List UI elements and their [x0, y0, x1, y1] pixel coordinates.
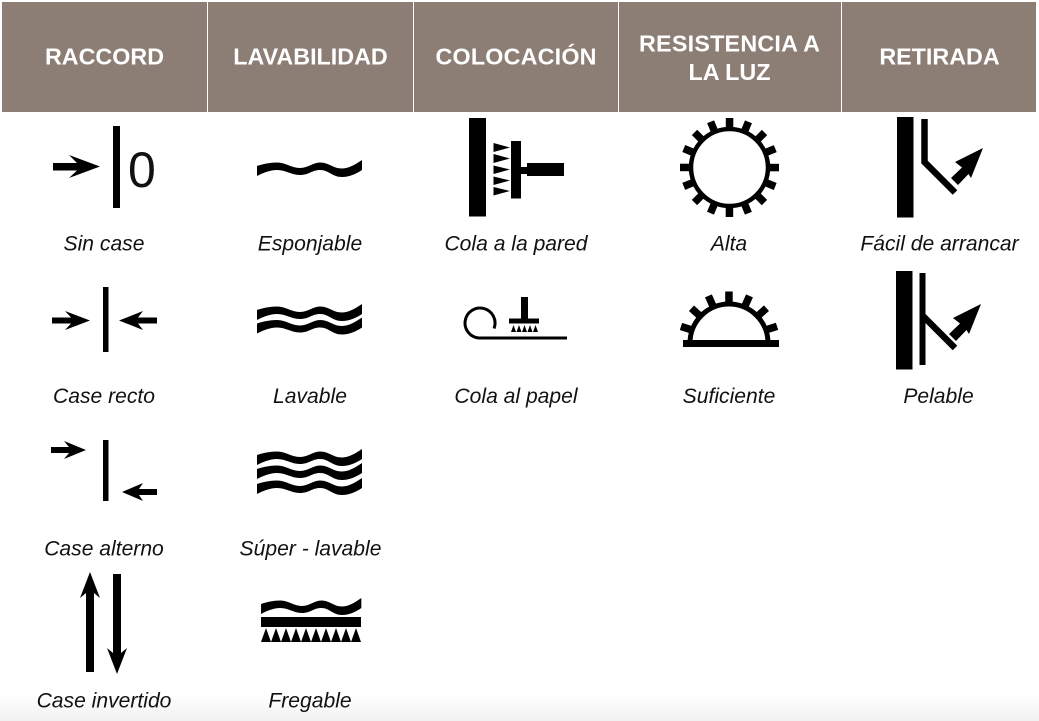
column: Lavabilidad [240, 160, 381, 712]
header: Resistencia a la luz: LA LUZ [689, 59, 770, 85]
icon: lavable [257, 304, 362, 334]
label: Esponjable: Esponjable [258, 232, 362, 256]
label: Cola a la pared: Cola a la pared [444, 232, 589, 256]
label: Alta: Alta [709, 232, 747, 256]
icon: sol alta [680, 118, 779, 217]
label: Fregable: Fregable [268, 690, 352, 712]
header: Raccord: RACCORD [45, 44, 164, 70]
label: Suficiente: Suficiente [683, 385, 775, 408]
icon: cola al papel [465, 297, 567, 338]
icon: fácil de arrancar [897, 117, 983, 218]
header: Retirada [842, 2, 1036, 112]
header: Raccord [2, 2, 207, 112]
column: Retirada [860, 117, 1020, 408]
column: Raccord [37, 126, 172, 712]
icon: cola a la pared [469, 118, 564, 216]
label: Súper - lavable: Súper - lavable [240, 538, 381, 560]
icon: pelable [896, 271, 981, 370]
label: Cola al papel: Cola al papel [454, 385, 579, 408]
icon: case invertido [80, 572, 127, 674]
icon: esponjable [257, 160, 362, 177]
column: Resistencia a la luz [680, 118, 779, 408]
header: Colocación: COLOCACIÓN [436, 42, 596, 70]
header row [2, 2, 1036, 112]
header: Lavabilidad [208, 2, 413, 112]
header: Lavabilidad: LAVABILIDAD [233, 44, 388, 70]
icon: case recto [52, 287, 157, 352]
column: Colocación [444, 118, 589, 408]
label: Case recto: Case recto [53, 385, 155, 408]
label: Case alterno: Case alterno [44, 538, 164, 560]
icon: sin case: 0 [128, 142, 156, 198]
label: Lavable: Lavable [273, 385, 347, 408]
header: Colocación [414, 2, 618, 112]
icon: sol suficiente [680, 292, 779, 347]
header: Resistencia a la luz: RESISTENCIA A [639, 30, 820, 56]
label: Fácil de arrancar: Fácil de arrancar [860, 232, 1020, 256]
label: Pelable: Pelable [903, 385, 974, 408]
header: Retirada: RETIRADA [879, 44, 1000, 70]
icon: súper lavable [257, 449, 362, 495]
header: Resistencia a la luz [619, 2, 841, 112]
icon: sin case [53, 126, 156, 208]
label: Case invertido: Case invertido [37, 690, 172, 712]
icon: case alterno [51, 440, 157, 501]
icon: fregable [261, 598, 361, 642]
label: Sin case: Sin case [64, 232, 144, 256]
